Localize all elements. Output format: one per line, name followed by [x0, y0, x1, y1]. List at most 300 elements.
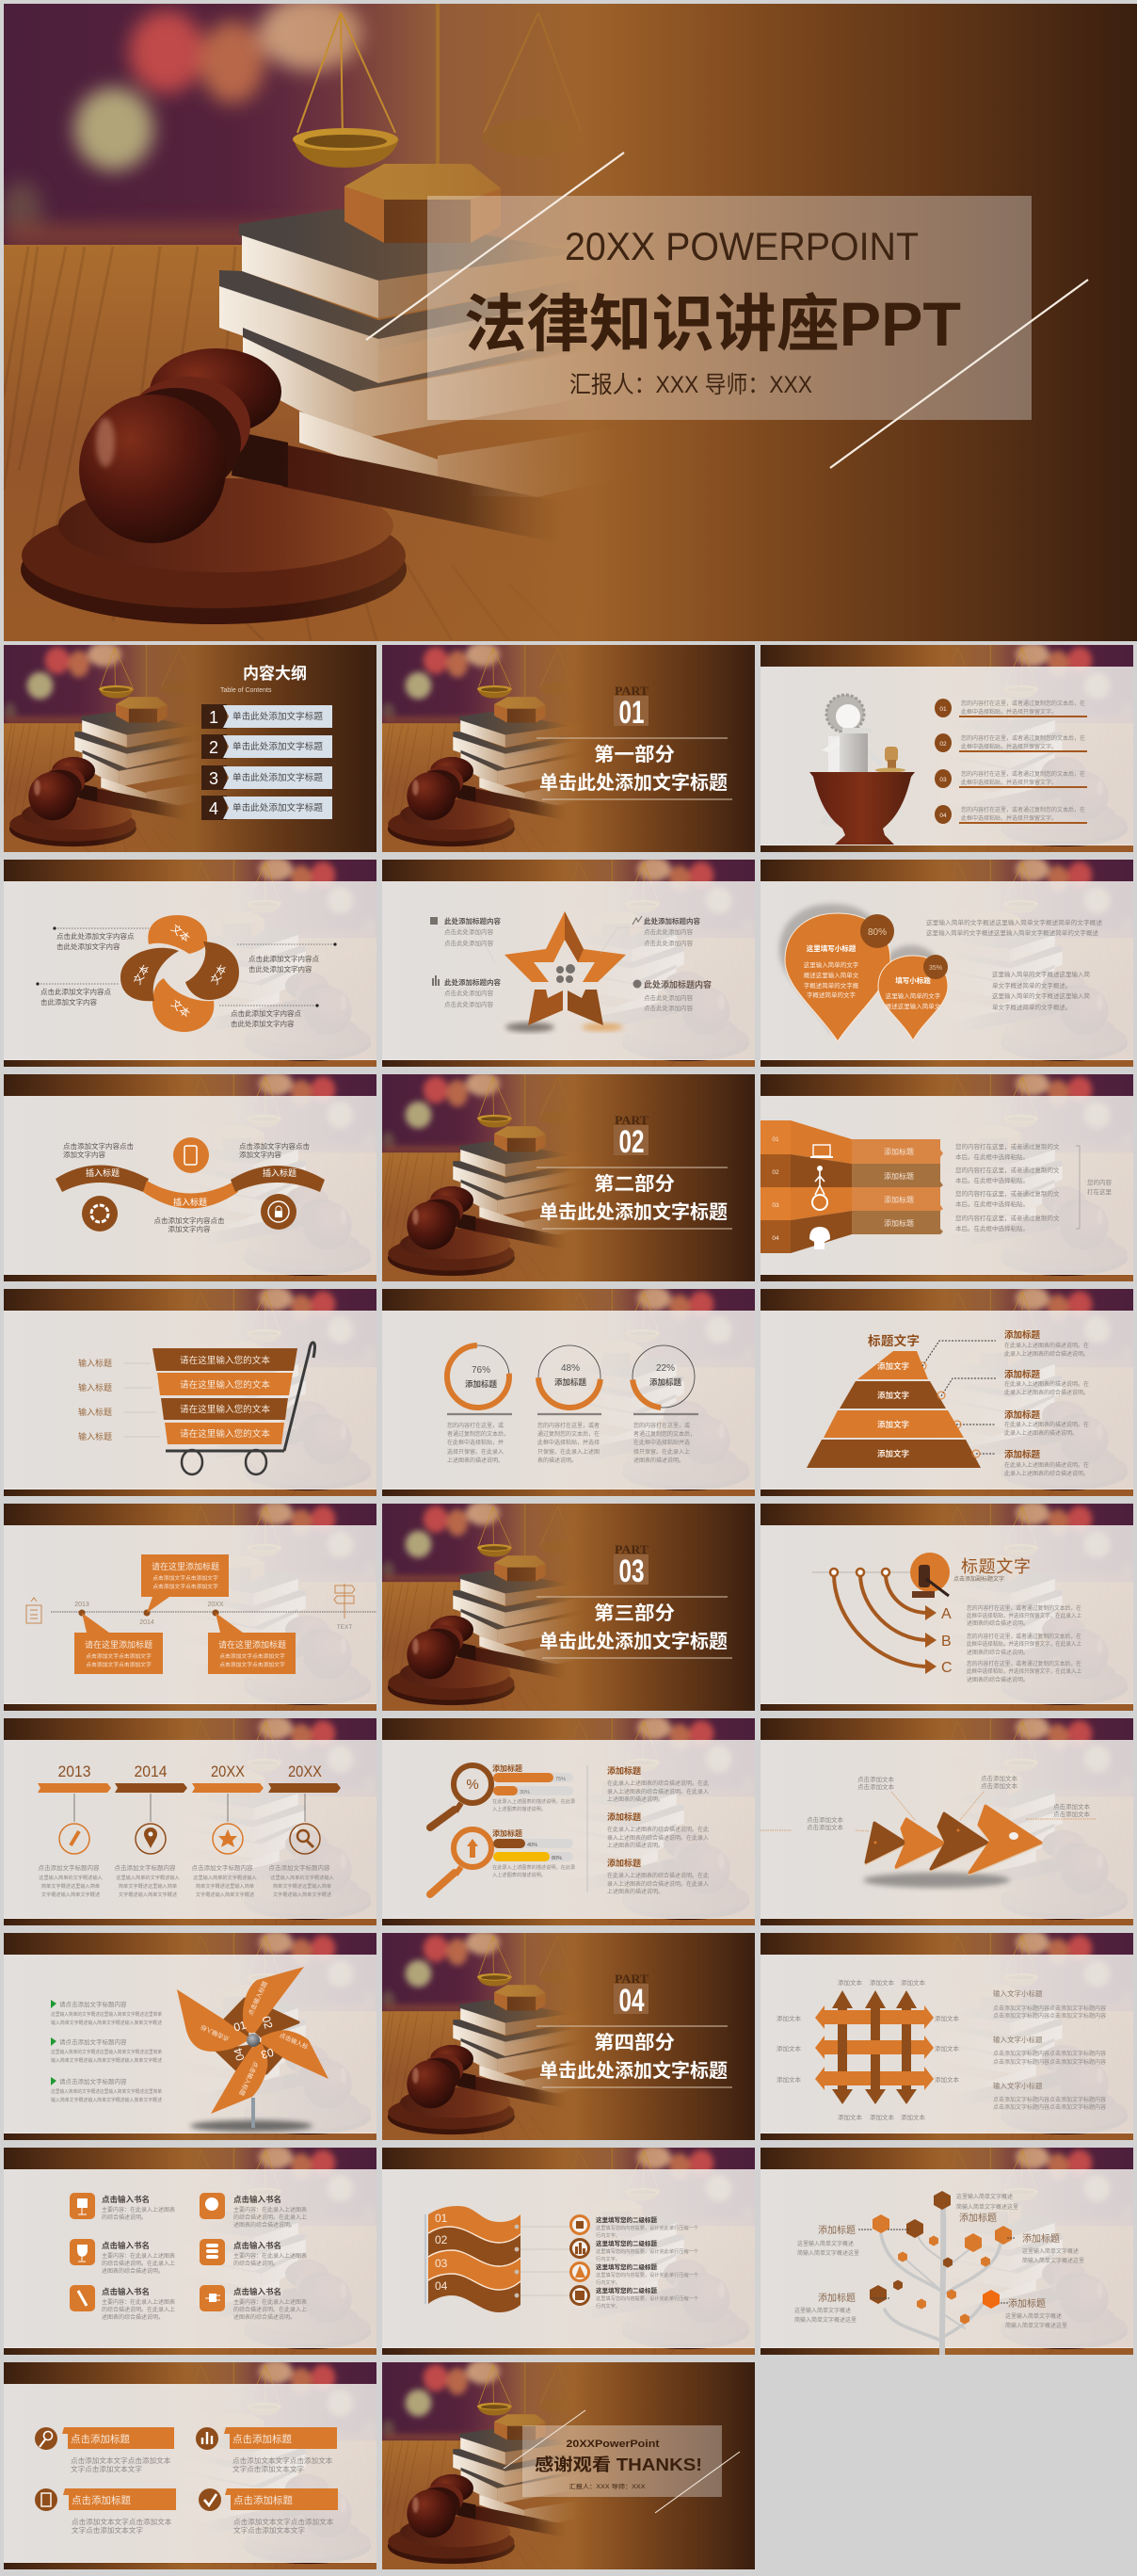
donut notes right: 在此框中选择粘贴并选: [633, 1439, 690, 1446]
list item 1: 这里填写您的内容提要，设计完此单行压缩一个: [596, 2224, 699, 2231]
pyramid note 4: 在此录入上述图表的描述说明。在: [1004, 1461, 1089, 1469]
text bottom centre: 添加文字内容: [168, 1224, 211, 1233]
chevrons: [866, 1806, 1041, 1873]
cart labels: [78, 1358, 112, 1441]
pinwheel ground shadow: [190, 2120, 312, 2132]
block top right: [633, 916, 700, 947]
pyramid note 4: [1004, 1449, 1089, 1477]
wave banner: 04: [435, 2279, 448, 2293]
label bottom left: 击此添加文字内容: [40, 997, 97, 1006]
panel: section 02: [382, 1074, 755, 1281]
bars two: 40%: [527, 1843, 537, 1848]
weave labels: 添加文本: [935, 2014, 960, 2022]
panel: tree diagram: [761, 2148, 1133, 2355]
chart: swirl petals: [120, 915, 239, 1032]
text lower right: 单文字概述简单的文字概述。: [992, 981, 1071, 990]
block top left: 点击此处添加内容: [444, 939, 493, 947]
text top left: [63, 1141, 134, 1159]
donut 22 percent: [630, 1343, 697, 1410]
text top right: [239, 1141, 310, 1159]
list item 04: [935, 805, 1087, 824]
year labels: 2013: [58, 1763, 90, 1780]
bars two note: 入上述图表的描述说明。: [492, 1871, 546, 1878]
timeline points: 20XX: [207, 1602, 224, 1608]
note C: [967, 1660, 1081, 1683]
list item 3: 行内文字。: [596, 2278, 620, 2286]
donut notes middle: 您的内容打在这里，或者: [537, 1422, 600, 1429]
ribbon middle: [143, 1181, 238, 1209]
big drop: 这里输入简单的文字: [804, 960, 859, 969]
label top right: 点击此添加文字内容点: [248, 954, 319, 963]
label top left: [53, 926, 135, 951]
column text 2: 这里输入简单的文字概述输入: [116, 1874, 180, 1881]
panel: pyramid: [761, 1289, 1133, 1496]
callout bottom right: [208, 1613, 296, 1674]
timeline points: 2014: [139, 1619, 154, 1626]
descriptive text: 您的内容打在这里，或者通过复制的文: [955, 1214, 1060, 1222]
card top left: 文字点击添加文本文字: [71, 2464, 142, 2473]
panel: star diagram: [382, 860, 755, 1067]
weave labels: 添加文本: [777, 2075, 802, 2084]
thanks main title: 感谢观看 THANKS!: [535, 2455, 702, 2474]
list item 2: 输入简单文字概述输入简单文字概述输入简单文字概述: [51, 2056, 162, 2064]
panel: donut percentages: [382, 1289, 755, 1496]
label upper left: [857, 1775, 894, 1791]
cart bars: 请在这里输入您的文本: [180, 1355, 270, 1366]
small drop: [878, 956, 948, 1040]
section title: 单击此处添加文字标题: [539, 2059, 728, 2082]
ribbon middle: 插入标题: [173, 1197, 207, 1207]
descriptive text: 本后。在此框中选择粘贴。: [955, 1176, 1029, 1184]
cart labels: 输入标题: [78, 1431, 112, 1441]
callout bottom left: 点击添加文字点击添加文字: [86, 1661, 152, 1668]
list item 2: [570, 2239, 699, 2262]
right note 2: 点击添加文字标题内容点击添加文字标题内容: [993, 2050, 1106, 2057]
grid item: trophy: [70, 2239, 175, 2275]
hero presenter line: 汇报人：XXX 导师：XXX: [569, 372, 812, 398]
donut notes middle: 通过复制您的文本后，在: [537, 1430, 600, 1438]
column of labels: 添加标题: [884, 1147, 914, 1156]
cart labels: 输入标题: [78, 1382, 112, 1393]
callout bottom right: 点击添加文字点击添加文字: [219, 1661, 285, 1668]
list item 1: [51, 2000, 162, 2026]
donut notes right: 者通过复制您的文本后，: [633, 1430, 696, 1438]
panel: section 03: [382, 1504, 755, 1711]
tree label lower right: [1005, 2297, 1067, 2329]
label upper left: 点击添加文本: [857, 1775, 894, 1783]
label bottom right: 击此处添加文字内容: [231, 1019, 295, 1028]
right note 1: 录入上述图表的综合描述说明。在此录入: [607, 1788, 709, 1795]
grid item: presentation: [70, 2193, 175, 2221]
right note 3: 添加标题: [607, 1858, 641, 1868]
list item 01: 01: [939, 706, 947, 713]
list item 2: 这里填写您的二级标题: [596, 2239, 657, 2247]
note C: 此框中选择粘贴，并选择只保留文字，在此录入上: [967, 1667, 1081, 1675]
list item 3: 这里输入简单的文字概述这里输入简单文字概述这里简单: [51, 2087, 162, 2095]
tree label upper right: 添加标题: [1022, 2232, 1060, 2245]
leaf nodes small: [893, 2235, 990, 2324]
pinwheel blades: 点击输入标题: [246, 1979, 269, 2017]
tree label upper left: 这里输入简单文字概述: [797, 2240, 854, 2247]
icon circle right: [261, 1194, 296, 1230]
column text 2: 文字概述输入简单文字概述: [119, 1891, 177, 1898]
label left: 点击添加文本: [807, 1815, 843, 1824]
panel: shopping cart diagram: [4, 1289, 376, 1496]
donut notes middle: 此框中选择粘贴，并选择: [537, 1439, 600, 1446]
text top right: [926, 918, 1103, 937]
part badge: [614, 1542, 649, 1589]
chart: swirl petals: 文本: [130, 962, 152, 987]
list item 2: 这里填写您的内容提要，设计完此单行压缩一个: [596, 2247, 699, 2255]
list item 2: [51, 2037, 162, 2064]
bracket note: [1076, 1146, 1113, 1229]
panel: judge figure list: [761, 645, 1133, 852]
donut 76 percent: 添加标题: [465, 1379, 497, 1389]
column text 3: 文字概述输入简单文字概述: [196, 1891, 254, 1898]
pyramid note 1: 此录入上述图表的综合描述说明。: [1004, 1350, 1089, 1358]
list item 4: [570, 2286, 699, 2310]
big drop: 字概述简单的文字: [807, 990, 857, 999]
right note 2: 输入文字小标题: [993, 2035, 1043, 2044]
right note 2: 在此录入上述图表的综合描述说明。在此: [607, 1826, 709, 1833]
list item 1: 请点击添加文字标题内容: [59, 2000, 127, 2008]
toc item 1: [201, 704, 332, 729]
donut notes middle: [537, 1422, 600, 1464]
grid item: pen: [70, 2285, 175, 2321]
block bottom right: 点击此处添加内容: [644, 993, 693, 1002]
card top right: [196, 2427, 337, 2473]
toc item 4: 单击此处添加文字标题: [232, 802, 323, 813]
panel: curved arrows ABC: [761, 1504, 1133, 1711]
toc item 1: 单击此处添加文字标题: [232, 711, 323, 722]
magnifier one: [430, 1765, 491, 1827]
icon: location: [136, 1824, 166, 1854]
right note 1: [993, 1988, 1106, 2020]
list item 4: 这里填写您的二级标题: [596, 2286, 657, 2294]
bracket note: 打在这里: [1087, 1187, 1113, 1196]
label right: 点击添加文本: [1053, 1810, 1090, 1818]
grid item: trophy: 点击输入书名: [102, 2241, 150, 2250]
grid item: database: 的综合描述说明。: [233, 2260, 279, 2267]
text lower right: 这里输入简单的文字概述这里输入简: [992, 970, 1090, 978]
text bottom centre: 点击添加文字内容点击: [154, 1216, 225, 1225]
panel: section 04: [382, 1933, 755, 2140]
part badge: [614, 684, 649, 731]
column of numbers: [761, 1120, 791, 1253]
part badge: [614, 1972, 649, 2019]
labels ABC: A: [941, 1606, 952, 1622]
list item 3: [51, 2077, 162, 2103]
right note 3: 上述图表的描述说明。: [607, 1888, 664, 1895]
donut notes right: 您的内容打在这里，或: [633, 1422, 690, 1429]
list item 04: 04: [939, 813, 947, 819]
card top left: 点击添加文本文字点击添加文本: [71, 2455, 171, 2465]
wave banner: [425, 2206, 520, 2312]
labels ABC: [941, 1606, 953, 1676]
weave labels: 添加文本: [901, 1978, 926, 1987]
icon: search: [290, 1824, 320, 1854]
callout top: [141, 1554, 229, 1613]
pinwheel pole: [251, 2098, 255, 2128]
label bottom left: [36, 982, 111, 1006]
grid item: pen: 述图表的综合描述说明。: [102, 2313, 164, 2321]
grid item: pen: 的综合描述说明。在此录入上: [102, 2306, 175, 2313]
sub heading: 点击添加副标题文字: [953, 1575, 1004, 1583]
pinwheel blades: 01: [232, 2018, 248, 2034]
label bottom right: 点击此添加文字内容点: [231, 1008, 301, 1018]
icon clipboard: [26, 1598, 41, 1623]
column text 4: 点击添加文字标题内容: [269, 1863, 330, 1872]
cart bars: [152, 1348, 297, 1444]
block bottom right: [633, 979, 712, 1012]
big drop: 字概述简单的文字概: [804, 981, 859, 990]
part badge: 01: [619, 695, 644, 731]
right note 2: [607, 1811, 709, 1849]
pyramid note 2: 此录入上述图表的综合描述说明。: [1004, 1389, 1089, 1396]
column of numbers: 02: [772, 1169, 779, 1176]
toc item 4: [201, 796, 332, 820]
tree label upper left: [797, 2224, 859, 2257]
list item 3: 请点击添加文字标题内容: [59, 2077, 127, 2085]
label left: 点击添加文本: [807, 1823, 843, 1831]
toc item 2: 单击此处添加文字标题: [232, 741, 323, 752]
right note 2: [993, 2035, 1106, 2066]
pyramid note 2: [1004, 1369, 1089, 1396]
column of labels: 添加标题: [884, 1195, 914, 1204]
column text 3: 这里输入简单的文字概述输入: [193, 1874, 257, 1881]
descriptive text: [955, 1142, 1060, 1232]
right note 2: 录入上述图表的综合描述说明。在此录入: [607, 1834, 709, 1842]
list item 1: 行内文字。: [596, 2231, 620, 2239]
right note 1: [607, 1765, 709, 1803]
toc item 3: 3: [209, 769, 218, 788]
pinwheel blades: 点击输入标题: [237, 2060, 261, 2098]
tree label lower left: 简输入简单文字概述这里: [794, 2316, 857, 2324]
card top right: 点击添加标题: [232, 2433, 292, 2445]
pyramid note 3: 添加标题: [1004, 1409, 1041, 1421]
grid item: plug: 的综合描述说明。在此录入上: [233, 2306, 307, 2313]
pyramid note 3: 在此录入上述图表的描述说明。在: [1004, 1421, 1089, 1428]
right note 1: 在此录入上述图表的综合描述说明。在此: [607, 1779, 709, 1787]
label upper right: 点击添加文本: [981, 1774, 1018, 1782]
year labels: 20XX: [288, 1763, 322, 1780]
label left: [807, 1815, 843, 1831]
label upper right: [981, 1774, 1018, 1790]
tree label lower left: 添加标题: [818, 2292, 856, 2304]
column text 4: 文字概述输入简单文字概述: [273, 1891, 331, 1898]
list item 1: 输入简单文字概述输入简单文字概述输入简单文字概述: [51, 2019, 162, 2026]
pyramid note 1: 添加标题: [1004, 1329, 1041, 1341]
grid item: presentation: 主要内容：在此录入上述图表: [102, 2206, 175, 2214]
note C: 您的内容打在这里，或者通过复制的文本后，在: [967, 1660, 1081, 1667]
list item 4: 这里填写您的内容提要，设计完此单行压缩一个: [596, 2294, 699, 2302]
tree label upper right: [1022, 2232, 1084, 2264]
callout bottom left: 点击添加文字点击添加文字: [86, 1652, 152, 1660]
weave labels: 添加文本: [777, 2014, 802, 2022]
grid item: presentation: 点击输入书名: [102, 2195, 150, 2204]
descriptive text: 本后。在此框中选择粘贴。: [955, 1199, 1029, 1208]
grid item: database: 点击输入书名: [233, 2241, 281, 2250]
tree label upper right: 简输入简单文字概述这里: [1022, 2257, 1084, 2264]
pinwheel blades: [177, 1967, 328, 2114]
year labels: 2014: [134, 1763, 168, 1780]
callout bottom right: 请在这里添加标题: [218, 1639, 286, 1650]
grid item: speech: 的综合描述说明。在此录入上: [233, 2214, 307, 2221]
pyramid heading: 标题文字: [868, 1333, 920, 1348]
pyramid note 4: 此录入上述图表的综合描述说明。: [1004, 1470, 1089, 1477]
ribbon left: 插入标题: [86, 1167, 120, 1178]
right note 2: 上述图表的描述说明。: [607, 1842, 664, 1849]
tree label lower right: 添加标题: [1008, 2297, 1046, 2310]
donut notes middle: 只保留。在此录入上述图: [537, 1448, 600, 1456]
80 percent badge: [860, 914, 894, 948]
part badge: PART: [615, 684, 649, 698]
block top right: 点击此处添加内容: [644, 939, 693, 947]
descriptive text: 本后。在此框中选择粘贴。: [955, 1224, 1029, 1232]
text top right: 这里输入简单的文字概述这里输入简单文字概述简单的文字概述: [926, 918, 1103, 926]
card top left: 点击添加标题: [71, 2433, 130, 2445]
block bottom left: [432, 975, 501, 1008]
cart bars: 请在这里输入您的文本: [180, 1379, 270, 1391]
text top right: 点击添加文字内容点击: [239, 1141, 310, 1151]
chart: swirl petals: 文本: [168, 997, 193, 1020]
panel: folded ribbon list: [761, 1074, 1133, 1281]
panel: four-petal diagram: [4, 860, 376, 1067]
list item 03: 此框中选择粘贴，并选择只保留文字。: [961, 779, 1057, 786]
card top right: 点击添加文本文字点击添加文本: [232, 2455, 333, 2465]
label bottom left: 点击此添加文字内容点: [40, 987, 111, 996]
donut notes right: [633, 1422, 696, 1464]
pinwheel blades: 03: [259, 2046, 275, 2062]
card bottom left: 文字点击添加文本文字: [72, 2525, 143, 2535]
list item 02: 您的内容打在这里，或者通过复制您的文本后，在: [961, 734, 1085, 742]
list item 02: 02: [939, 741, 947, 748]
magnifier two: [430, 1829, 491, 1894]
text lower right: [992, 970, 1090, 1011]
note A: 您的内容打在这里，或者通过复制的文本后，在: [967, 1604, 1081, 1612]
wave banner: 02: [435, 2233, 448, 2246]
pyramid note 3: 此录入上述图表的描述说明。: [1004, 1429, 1078, 1437]
drop shadows: [779, 904, 943, 1034]
grid item: database: 主要内容：在此录入上述图表: [233, 2252, 307, 2260]
label top right: [248, 942, 337, 974]
grid item: speech: 述图表的综合描述说明。: [233, 2221, 296, 2229]
column text 1: 简单文字概述这里输入简单: [41, 1882, 100, 1890]
block top right: 点击此处添加内容: [644, 927, 693, 936]
panel: wave banner list: [382, 2148, 755, 2355]
grid item: trophy: 的综合描述说明。在此录入上: [102, 2260, 175, 2267]
icon circle top: [173, 1137, 209, 1173]
ribbon left: [56, 1166, 149, 1192]
toc heading: 内容大纲: [243, 664, 307, 683]
grid item: speech: 点击输入书名: [233, 2195, 281, 2204]
card top right: 文字点击添加文本文字: [232, 2464, 304, 2473]
right note 1: 输入文字小标题: [993, 1988, 1043, 1998]
icon: star: [213, 1824, 243, 1854]
column text 1: 这里输入简单的文字概述输入: [39, 1874, 103, 1881]
column of labels: 添加标题: [884, 1218, 914, 1228]
small drop: 这里输入简单的文字: [886, 991, 941, 1000]
chart: swirl petals: 文本: [207, 962, 230, 987]
tree label lower left: [794, 2292, 857, 2324]
thanks english title: 20XXPowerPoint: [567, 2439, 660, 2450]
donut notes left: [447, 1422, 509, 1464]
column text 3: [192, 1863, 257, 1898]
panel: year chevrons: [4, 1718, 376, 1925]
panel: wave ribbon: [4, 1074, 376, 1281]
column text 4: [269, 1863, 334, 1898]
grid item: speech: 主要内容：在此录入上述图表: [233, 2206, 307, 2214]
card bottom right: 点击添加文本文字点击添加文本: [233, 2517, 334, 2526]
list item 2: 这里输入简单的文字概述这里输入简单文字概述这里简单: [51, 2048, 162, 2055]
bars one: 添加标题: [492, 1763, 522, 1773]
note A: [967, 1604, 1081, 1627]
card bottom left: 点击添加标题: [72, 2494, 131, 2506]
bars two note: 在此录入上述图表的描述说明。在此录: [492, 1863, 575, 1871]
donut notes left: 选择只保留。在此录入: [447, 1448, 504, 1456]
section title: [539, 1602, 728, 1652]
bars one note: [492, 1797, 575, 1812]
illustration: figure at podium: [809, 695, 915, 845]
right note 3: [607, 1858, 709, 1895]
pyramid connectors: [919, 1341, 996, 1457]
tree label upper left: 简输入简单文字概述这里: [797, 2249, 859, 2257]
icon circle left: [82, 1196, 118, 1232]
block bottom left: 此处添加标题内容: [444, 977, 501, 987]
section title: 单击此处添加文字标题: [539, 771, 728, 794]
grid item: speech: [200, 2193, 307, 2229]
note C: 述图表的综合描述说明。: [967, 1676, 1029, 1683]
list item 02: 此框中选择粘贴，并选择只保留文字。: [961, 743, 1057, 750]
card bottom right: 点击添加标题: [233, 2494, 293, 2506]
thanks presenter: 汇报人：XXX 导师：XXX: [568, 2482, 646, 2490]
list item 1: [570, 2215, 699, 2239]
80 percent badge: 80%: [868, 927, 887, 938]
ribbon right: [231, 1166, 325, 1192]
year labels: [58, 1763, 322, 1780]
donut notes right: 择只保留。在此录入上: [633, 1448, 690, 1456]
donut 48 percent: [536, 1343, 603, 1410]
right note 3: 点击添加文字标题内容点击添加文字标题内容: [993, 2096, 1106, 2103]
section title: 第二部分: [594, 1173, 675, 1195]
donut notes middle: 表的描述说明。: [537, 1457, 577, 1464]
note B: 述图表的综合描述说明。: [967, 1649, 1029, 1656]
donut notes left: 者通过复制您的文本后，: [447, 1430, 509, 1438]
horizontal arrows: [815, 2005, 934, 2090]
right note 3: 点击添加文字标题内容点击添加文字标题内容: [993, 2103, 1106, 2111]
tree label upper left: 添加标题: [818, 2224, 856, 2236]
labels ABC: B: [941, 1634, 952, 1650]
donut notes left: 在此框中选择粘贴，并: [447, 1439, 504, 1446]
pyramid note 1: [1004, 1329, 1089, 1358]
column of numbers: 01: [772, 1136, 779, 1143]
grid item: plug: [200, 2285, 307, 2321]
tree label upper right: 这里输入简单文字概述: [1022, 2247, 1079, 2255]
donut 48 percent: 48%: [561, 1363, 580, 1374]
block top left: 此处添加标题内容: [444, 916, 501, 926]
column text 4: 这里输入简单的文字概述输入: [270, 1874, 334, 1881]
tree label top: 这里输入简单文字概述: [956, 2193, 1013, 2200]
weave labels: 添加文本: [901, 2113, 926, 2121]
section title: [539, 2032, 728, 2082]
panel: chevron arrow diagram: [761, 1718, 1133, 1925]
callout top: 点击添加文字点击添加文字: [152, 1583, 218, 1590]
tree label lower right: 简输入简单文字概述这里: [1005, 2322, 1067, 2329]
list item 03: 03: [939, 777, 947, 783]
chevron bars: [38, 1783, 341, 1793]
decorative diagonal lines: [366, 153, 1088, 468]
donut notes left: 您的内容打在这里，或: [447, 1422, 504, 1429]
